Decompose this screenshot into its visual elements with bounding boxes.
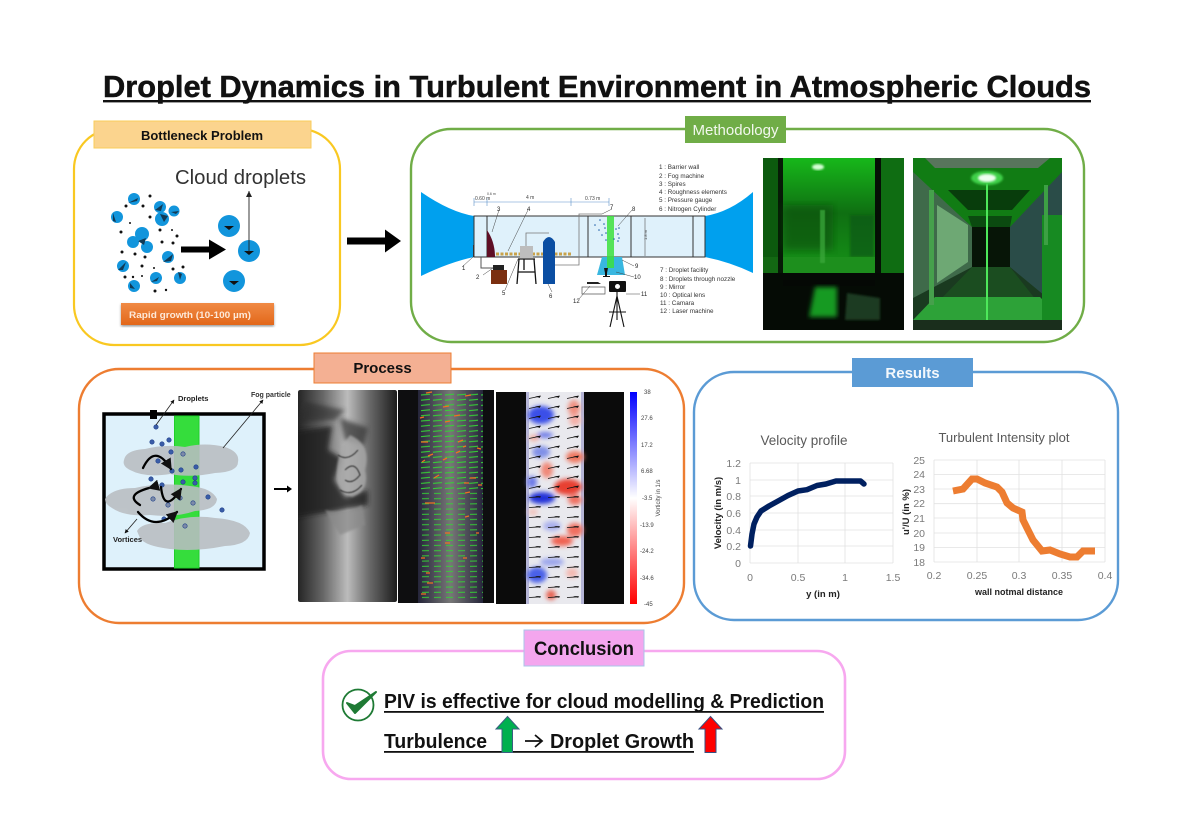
heading: bottleneck problem: Bottleneck Problem xyxy=(141,128,263,143)
heading: methodology: Methodology xyxy=(692,122,779,139)
legend: items 7 to 12: 11 : Camara xyxy=(660,300,695,307)
image: grayscale flow visualisation xyxy=(290,390,397,602)
label: rapid growth: Rapid growth (10-100 µm) xyxy=(129,310,251,321)
legend: items 7 to 12 xyxy=(660,267,736,315)
chart: velocity profile: 0.4 xyxy=(726,525,741,537)
diagram: droplets and vortices in cloud chamber: Vortices xyxy=(113,535,142,544)
wind tunnel diagram xyxy=(421,192,753,327)
wind tunnel diagram: 7 xyxy=(610,205,614,211)
heading: results xyxy=(852,358,973,387)
chart: turbulent intensity plot: 20 xyxy=(913,528,925,540)
heading: process xyxy=(314,353,451,383)
label: rapid growth xyxy=(121,303,274,325)
colorbar: vorticity: 6.68 xyxy=(641,469,653,475)
legend: items 7 to 12: 8 : Droplets through nozzle xyxy=(660,276,736,283)
chart: velocity profile: 0 xyxy=(747,572,753,584)
text: turbulence to droplet growth: Turbulence xyxy=(384,731,487,753)
colorbar: vorticity: -24.2 xyxy=(640,549,654,555)
text: turbulence to droplet growth: Droplet Growth xyxy=(550,731,694,753)
chart: turbulent intensity plot: Turbulent Intensity plot xyxy=(938,430,1070,445)
chart: velocity profile: 1 xyxy=(842,572,848,584)
chart: turbulent intensity plot: 21 xyxy=(913,513,925,525)
colorbar: vorticity: -3.5 xyxy=(642,496,653,502)
chart: turbulent intensity plot: 18 xyxy=(913,557,925,569)
chart: velocity profile: 1 xyxy=(735,475,741,487)
legend: items 1 to 6 xyxy=(659,164,727,213)
clouds xyxy=(105,444,250,550)
chart: velocity profile: 0.6 xyxy=(726,508,741,520)
wind tunnel diagram: 2 xyxy=(476,275,480,281)
chart: turbulent intensity plot: 0.4 xyxy=(1098,570,1112,582)
icon: green up arrow xyxy=(496,716,519,752)
heading: process: Process xyxy=(353,360,412,377)
chart: turbulent intensity plot: 0.25 xyxy=(967,570,987,582)
wind tunnel diagram: 1 xyxy=(462,266,466,272)
vorticity blobs xyxy=(527,400,584,600)
chart: velocity profile: 0.2 xyxy=(726,541,741,553)
colorbar: vorticity: -45 xyxy=(644,602,653,608)
arrow: bottleneck to methodology xyxy=(347,230,401,252)
colorbar: vorticity: 38 xyxy=(644,390,651,396)
chart: velocity profile: 1.5 xyxy=(886,572,900,584)
wind tunnel diagram: 5 xyxy=(502,291,506,297)
wind tunnel diagram: 9 xyxy=(635,264,639,270)
legend: items 1 to 6: 3 : Spires xyxy=(659,181,686,188)
chart: turbulent intensity plot: 25 xyxy=(913,455,925,467)
legend: items 7 to 12: 10 : Optical lens xyxy=(660,292,705,299)
wind tunnel diagram: 8 xyxy=(632,207,636,213)
legend: items 1 to 6: 2 : Fog machine xyxy=(659,173,705,180)
chart: turbulent intensity plot xyxy=(901,430,1112,597)
arrow: diagram to flow image xyxy=(274,486,292,492)
diagram: droplets and vortices in cloud chamber xyxy=(104,392,291,569)
colorbar: vorticity: 27.6 xyxy=(641,416,653,422)
wind tunnel diagram: 4 m xyxy=(526,195,534,201)
panel: conclusion xyxy=(323,630,845,779)
legend: items 1 to 6: 1 : Barrier wall xyxy=(659,164,699,171)
legend: items 7 to 12: 9 : Mirror xyxy=(660,284,685,291)
text: turbulence to droplet growth xyxy=(384,731,694,753)
chart: turbulent intensity plot: 0.3 xyxy=(1012,570,1026,582)
chart: velocity profile: y (in m) xyxy=(806,589,840,600)
panel: process xyxy=(79,353,684,623)
wind tunnel diagram: 0.6 m xyxy=(487,192,496,196)
wind tunnel diagram: 10 xyxy=(634,275,641,281)
icon: red up arrow xyxy=(699,716,722,752)
colorbar: vorticity xyxy=(630,390,662,608)
legend: items 7 to 12: 12 : Laser machine xyxy=(660,308,714,315)
chart: turbulent intensity plot: 23 xyxy=(913,484,925,496)
legend: items 7 to 12: 7 : Droplet facility xyxy=(660,267,709,274)
legend: items 1 to 6: 5 : Pressure gauge xyxy=(659,197,713,204)
icon: check mark xyxy=(342,690,376,720)
label: cloud droplets: Cloud droplets xyxy=(175,167,306,189)
chart: turbulent intensity plot: u'/U (in %) xyxy=(901,489,912,535)
diagram: droplets and vortices in cloud chamber: Droplets xyxy=(178,394,208,403)
chart: velocity profile: 0 xyxy=(735,558,741,570)
chart: turbulent intensity plot: 0.35 xyxy=(1052,570,1072,582)
heading: bottleneck problem xyxy=(94,121,311,148)
legend: items 1 to 6: 6 : Nitrogen Cylinder xyxy=(659,206,716,213)
image: PIV velocity vectors xyxy=(398,390,494,603)
chart: velocity profile xyxy=(713,433,900,600)
image: vorticity map xyxy=(496,392,624,604)
colorbar: vorticity: Vorticity in 1/s xyxy=(656,479,662,517)
heading: conclusion xyxy=(524,630,644,666)
panel: results xyxy=(694,358,1118,620)
wind tunnel diagram: 6 xyxy=(549,294,553,300)
vortices arrows xyxy=(134,456,181,522)
wind tunnel diagram: 3 xyxy=(497,207,501,213)
colorbar: vorticity: -34.6 xyxy=(640,576,654,582)
small cloud droplets cluster xyxy=(111,193,186,292)
chart: turbulent intensity plot: 19 xyxy=(913,542,925,554)
chart: velocity profile: Velocity (in m/s) xyxy=(713,477,724,549)
chart: turbulent intensity plot: 22 xyxy=(913,498,925,510)
chart: turbulent intensity plot: 0.2 xyxy=(927,570,941,582)
diagram: droplets and vortices in cloud chamber: Fog particle xyxy=(251,392,291,399)
legend: items 1 to 6: 4 : Roughness elements xyxy=(659,189,727,196)
text: PIV effectiveness: PIV is effective for cloud modelling & Prediction xyxy=(384,691,824,713)
leader arrows xyxy=(125,400,263,533)
chart: turbulent intensity plot: 24 xyxy=(913,469,925,481)
large cloud droplets xyxy=(218,191,260,292)
chart: turbulent intensity plot: wall notmal distance xyxy=(974,587,1063,597)
wind tunnel diagram: 4 xyxy=(527,207,531,213)
title: Droplet Dynamics in Turbulent Environment in Atmospheric Clouds xyxy=(103,69,1091,104)
heading: methodology xyxy=(685,116,786,143)
photo: laser in tunnel front view xyxy=(913,158,1062,330)
wind tunnel diagram: 0.60 m xyxy=(475,196,490,202)
wind tunnel diagram: 0.73 m xyxy=(585,196,600,202)
panel: methodology xyxy=(411,116,1084,342)
wind tunnel diagram: 11 xyxy=(641,292,648,298)
colorbar: vorticity: -13.9 xyxy=(640,523,654,529)
chart: velocity profile: 0.5 xyxy=(791,572,805,584)
wind tunnel diagram: 1.8 m xyxy=(643,229,648,240)
photo: laser in tunnel side view xyxy=(763,158,904,330)
arrow: growth xyxy=(181,240,226,260)
heading: conclusion: Conclusion xyxy=(534,639,634,660)
wind tunnel diagram: 12 xyxy=(573,299,580,305)
droplets xyxy=(149,425,224,528)
chart: velocity profile: 1.2 xyxy=(726,458,741,470)
heading: results: Results xyxy=(885,365,940,382)
panel: bottleneck problem xyxy=(74,121,340,345)
chart: velocity profile: 0.8 xyxy=(726,491,741,503)
colorbar: vorticity: 17.2 xyxy=(641,443,653,449)
chart: velocity profile: Velocity profile xyxy=(760,433,848,448)
